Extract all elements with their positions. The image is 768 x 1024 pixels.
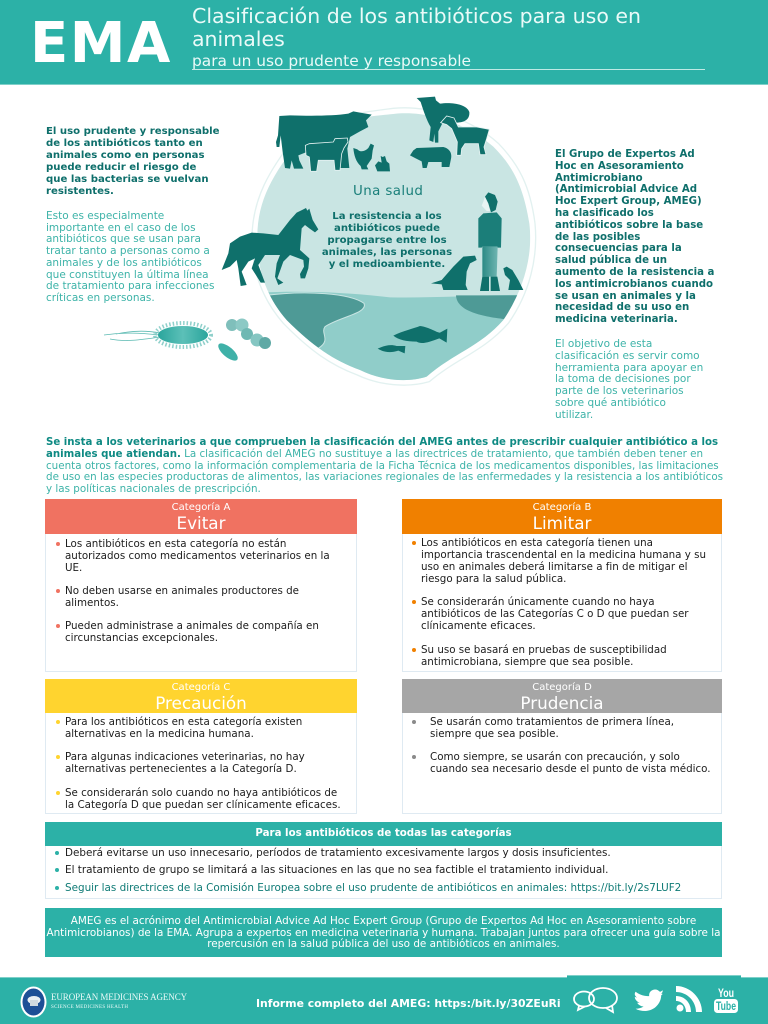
AMEG definition box: repercusión en la salud pública del uso de antibióticos en animales. <box>207 938 560 950</box>
veterinary guidance paragraph: Se insta a los veterinarios a que comprueben la clasificación del AMEG antes de prescribir cualquier antibiótico a los <box>46 437 718 448</box>
social media box <box>567 975 741 1024</box>
category A bullets: autorizados como medicamentos veterinarios en la <box>65 550 330 562</box>
AMEG expert group text: ha clasificado los <box>555 208 654 219</box>
intro text: critical antibiotics: animales y de los antibióticos <box>46 257 202 269</box>
category A header <box>45 499 357 534</box>
veterinary guidance paragraph: de uso en las especies productoras de alimentos, las variaciones regionales de las enfermedades y la resistencia a los antibióticos <box>46 471 723 483</box>
One Health text: animales, las personas <box>322 247 452 258</box>
icon: rss feed <box>676 986 702 1012</box>
category B bullets: Su uso se basará en pruebas de susceptibilidad <box>421 644 667 656</box>
classification objective text: clasificación es servir como <box>555 350 700 362</box>
sheep, goat, pig <box>410 97 489 168</box>
category D bullets: Como siempre, se usarán con precaución, y solo <box>430 751 680 763</box>
AMEG expert group text: se usan en animales y la <box>555 291 696 302</box>
category A bullets: circunstancias excepcionales. <box>65 632 218 644</box>
all categories header <box>45 822 722 846</box>
EMA logotype: EMA <box>30 11 172 76</box>
EMA agency logo: EUROPEAN MEDICINES AGENCY <box>51 992 187 1002</box>
AMEG definition box: Antimicrobianos) de la EMA. Agrupa a expertos en medicina veterinaria y humana. Trabajan juntos para ofrecer una guía sobre la <box>46 927 720 939</box>
all categories bullets <box>55 847 681 894</box>
all categories bullets: El tratamiento de grupo se limitará a las situaciones en las que no sea factible el tratamiento individual. <box>65 864 608 876</box>
left river bank <box>263 293 364 348</box>
full report link: Informe completo del AMEG: https:/bit.ly/30ZEuRi <box>256 997 561 1010</box>
classification objective text: sobre qué antibiótico <box>555 397 666 409</box>
category C bullets <box>56 716 341 811</box>
fish large <box>393 326 447 343</box>
classification objective text: utilizar. <box>555 409 593 421</box>
category C bullets: Se considerarán solo cuando no haya antibióticos de <box>65 787 337 799</box>
illustration: One Health circle and bacteria <box>104 96 536 386</box>
category D header: Prudencia <box>520 693 604 713</box>
cow, calf, hen, rabbit <box>276 111 390 171</box>
AMEG expert group text: El Grupo de Expertos Ad <box>555 149 695 160</box>
category A bullets: Pueden administrase a animales de compañía en <box>65 620 319 632</box>
intro text: critical antibiotics: críticas en personas. <box>46 292 155 304</box>
category D bullets: Se usarán como tratamientos de primera línea, <box>430 716 674 728</box>
category B bullets: riesgo para la salud pública. <box>421 573 566 585</box>
veterinary guidance paragraph: y las políticas nacionales de prescripción. <box>46 483 261 495</box>
right bank <box>456 295 523 319</box>
category B header <box>402 499 722 534</box>
classification objective text: El objetivo de esta <box>555 338 652 350</box>
EMA agency logo: SCIENCE MEDICINES HEALTH <box>51 1005 128 1010</box>
category A bullets: UE. <box>65 562 82 574</box>
AMEG expert group text: salud pública de un <box>555 255 667 266</box>
AMEG expert group text: medicina veterinaria. <box>555 314 678 325</box>
footer <box>0 977 768 1024</box>
icon: twitter bird <box>635 990 663 1011</box>
all categories bullets: Seguir las directrices de la Comisión Europea sobre el uso prudente de antibióticos en animales: https://bit.ly/2s7LUF2 <box>65 882 681 894</box>
intro text: prudent use: resistentes. <box>46 186 114 197</box>
One Health text: antibióticos puede <box>334 223 440 234</box>
classification objective text: parte de los veterinarios <box>555 385 684 397</box>
icon: speech bubbles <box>574 988 617 1012</box>
One Health heading: Una salud <box>353 184 423 199</box>
EMA agency logo <box>20 986 187 1018</box>
category B bullets: antibióticos de las Categorías C o D que puedan ser <box>421 608 689 620</box>
AMEG expert group text: los antimicrobianos cuando <box>555 279 713 290</box>
One Health text: propagarse entre los <box>327 235 447 246</box>
intro text: prudent use: animales como en personas <box>46 150 205 161</box>
veterinary guidance paragraph: animales que atiendan. La clasificación del AMEG no sustituye a las directrices de tratamiento, que también deben tener en <box>46 448 703 460</box>
fish small <box>378 345 405 353</box>
icon: YouTube <box>714 986 738 1013</box>
subtitle: para un uso prudente y responsable <box>192 52 471 70</box>
AMEG expert group text: consecuencias para la <box>555 243 682 254</box>
category D bullets: cuando sea necesario desde el punto de vista médico. <box>430 763 711 775</box>
classification objective text <box>555 338 703 421</box>
intro text: critical antibiotics: importante en el caso de los <box>46 222 196 234</box>
category B bullets: uso en animales deberá limitarse a fin de mitigar el <box>421 561 688 573</box>
One Health text <box>322 211 452 270</box>
AMEG expert group text: aumento de la resistencia a <box>555 267 714 278</box>
category B bullets: Se considerarán únicamente cuando no haya <box>421 596 655 608</box>
AMEG expert group text: de las posibles <box>555 232 640 243</box>
horse <box>222 208 318 286</box>
intro text: prudent use: El uso prudente y responsable <box>46 126 220 137</box>
category A bullets <box>56 538 330 644</box>
category B bullets: antimicrobiana, siempre que sea posible. <box>421 656 633 668</box>
category A bullets: alimentos. <box>65 597 119 609</box>
AMEG expert group text: Hoc Expert Group, AMEG) <box>555 196 702 207</box>
intro text: critical antibiotics: Esto es especialmente <box>46 210 164 222</box>
category B bullets: importancia trascendental en la medicina humana y su <box>421 549 706 561</box>
main title: animales <box>192 27 285 51</box>
panel: category D <box>402 679 722 814</box>
One Health text: y el medioambiente. <box>329 259 445 270</box>
category C header: Categoría C <box>172 682 230 693</box>
AMEG expert group text: Antimicrobiano <box>555 173 643 184</box>
man, dog and cat <box>431 192 523 291</box>
main title: Clasificación de los antibióticos para uso en <box>192 4 641 28</box>
category D bullets <box>412 716 711 775</box>
category C bullets: la Categoría D que puedan ser clínicamente eficaces. <box>65 799 341 811</box>
category B bullets: Los antibióticos en esta categoría tienen una <box>421 537 653 549</box>
intro text: prudent use: de los antibióticos tanto en <box>46 138 203 149</box>
AMEG expert group text: antibióticos sobre la base <box>555 220 703 231</box>
One Health text: La resistencia a los <box>332 211 442 222</box>
intro text: critical antibiotics: que constituyen la última línea <box>46 268 209 280</box>
intro text: prudent use <box>46 126 220 197</box>
classification objective text: la toma de decisiones por <box>555 373 691 385</box>
category D header: Categoría D <box>532 682 592 693</box>
category B bullets <box>412 537 706 668</box>
outer ring <box>252 108 536 385</box>
veterinary guidance paragraph <box>46 436 723 495</box>
category A bullets: Los antibióticos en esta categoría no están <box>65 538 286 550</box>
intro text: critical antibiotics: de tratamiento para infecciones <box>46 280 214 292</box>
main title <box>192 4 641 51</box>
intro text: prudent use: puede reducir el riesgo de <box>46 162 196 173</box>
panel: category A <box>45 499 357 672</box>
category A header: Categoría A <box>172 502 230 513</box>
AMEG expert group text: (Antimicrobial Advice Ad <box>555 184 697 195</box>
category B header: Limitar <box>533 513 591 533</box>
panel: category B <box>402 499 722 672</box>
panel: all categories <box>45 822 722 899</box>
intro text: critical antibiotics: antibióticos que se usan para <box>46 233 201 245</box>
category C bullets: alternativas pertenecientes a la Categoría D. <box>65 763 297 775</box>
category D bullets: siempre que sea posible. <box>430 728 559 740</box>
AMEG definition box <box>45 908 722 957</box>
bacteria <box>104 318 271 364</box>
intro text: critical antibiotics: tratar tanto a personas como a <box>46 245 210 257</box>
category C bullets: alternativas en la medicina humana. <box>65 728 254 740</box>
icon: YouTube: You <box>718 986 734 1000</box>
AMEG definition box: AMEG es el acrónimo del Antimicrobial Advice Ad Hoc Expert Group (Grupo de Expertos Ad Hoc en Asesoramiento sobre <box>71 915 696 927</box>
category C header: Precaución <box>155 693 247 713</box>
category A header: Evitar <box>177 513 225 533</box>
veterinary guidance paragraph: cuenta otros factores, como la información complementaria de la Ficha Técnica de los medicamentos disponibles, las limitaciones <box>46 460 719 472</box>
header banner <box>0 0 768 85</box>
category B header: Categoría B <box>533 502 591 513</box>
category C bullets: Para los antibióticos en esta categoría existen <box>65 716 302 728</box>
category B bullets: clínicamente eficaces. <box>421 620 536 632</box>
all categories bullets: Deberá evitarse un uso innecesario, períodos de tratamiento excesivamente largos y dosis insuficientes. <box>65 847 611 859</box>
all categories header: Para los antibióticos de todas las categorías <box>255 827 512 839</box>
blob with water <box>258 113 530 380</box>
category A bullets: No deben usarse en animales productores de <box>65 585 299 597</box>
intro text: critical antibiotics <box>46 210 214 304</box>
category C header <box>45 679 357 713</box>
category D header <box>402 679 722 713</box>
AMEG expert group text <box>555 149 714 325</box>
classification objective text: herramienta para apoyar en <box>555 362 703 374</box>
AMEG expert group text: necesidad de su uso en <box>555 302 689 313</box>
intro text: prudent use: que las bacterias se vuelvan <box>46 174 209 185</box>
AMEG expert group text: Hoc en Asesoramiento <box>555 161 684 172</box>
category C bullets: Para algunas indicaciones veterinarias, no hay <box>65 751 305 763</box>
panel: category C <box>45 679 357 814</box>
